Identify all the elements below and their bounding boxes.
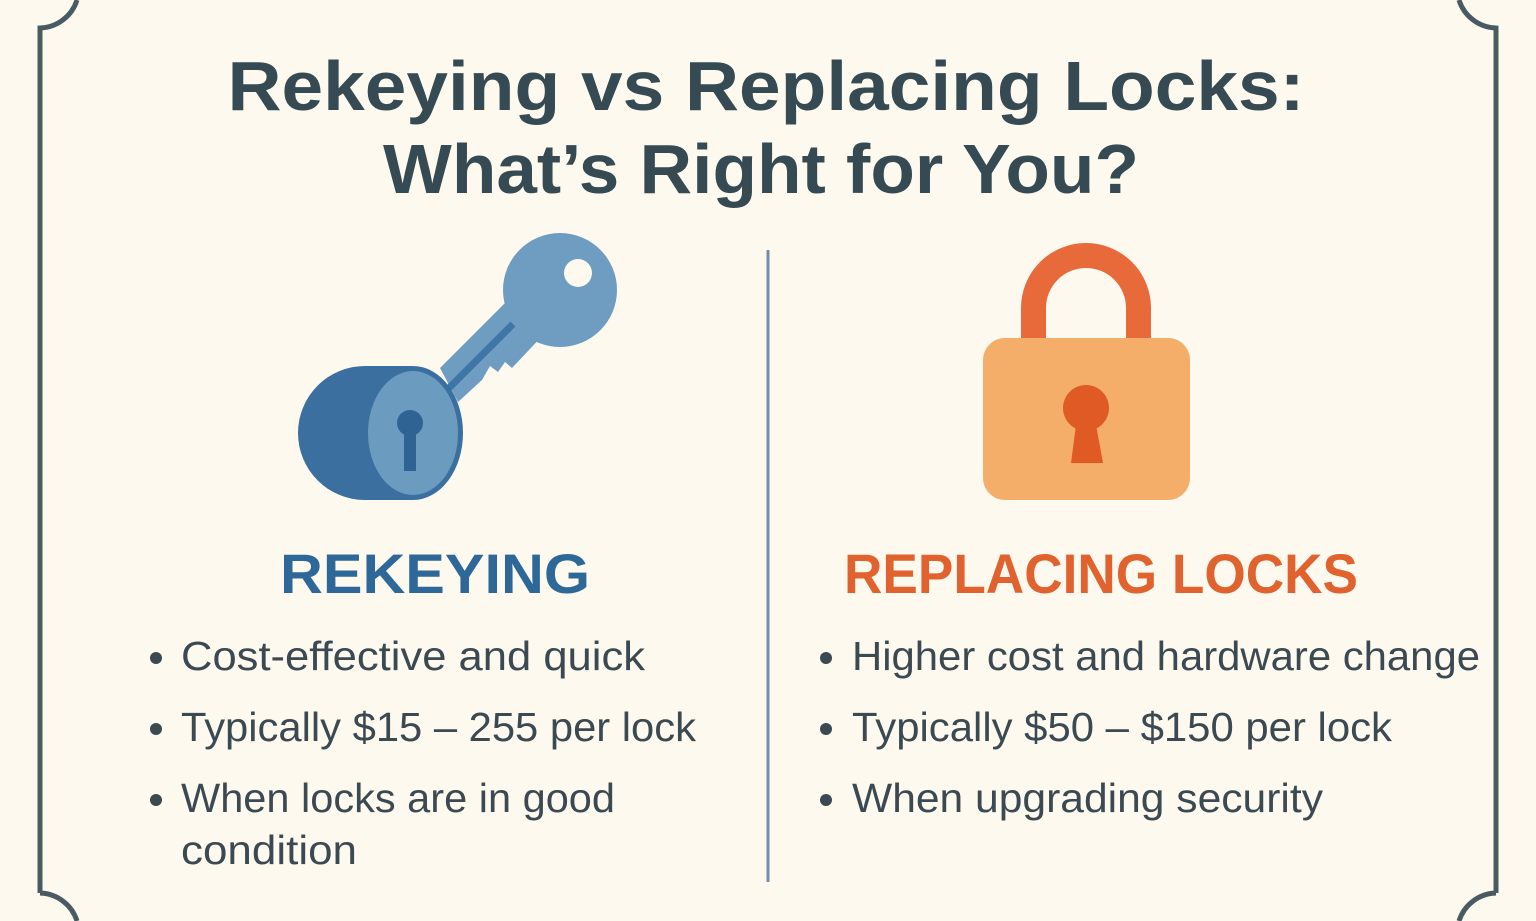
heading: replacing locks: REPLACING LOCKS bbox=[844, 542, 1358, 605]
list: rekeying points: Typically $15 – 255 per lock bbox=[181, 704, 696, 750]
title bbox=[228, 47, 1304, 208]
list: replacing points bbox=[820, 633, 1480, 821]
title: What’s Right for You? bbox=[383, 130, 1139, 208]
icon: padlock bbox=[983, 256, 1190, 500]
list: rekeying points bbox=[150, 633, 696, 873]
list: replacing points: When upgrading security bbox=[852, 775, 1324, 821]
icon: key in lock cylinder bbox=[298, 233, 617, 500]
list: rekeying points: condition bbox=[181, 827, 357, 873]
list: replacing points: Higher cost and hardware change bbox=[852, 633, 1480, 679]
divider bbox=[766, 250, 770, 882]
list: rekeying points: When locks are in good bbox=[181, 775, 615, 821]
list: replacing points: Typically $50 – $150 per lock bbox=[852, 704, 1393, 750]
list: rekeying points: Cost-effective and quick bbox=[181, 633, 646, 679]
heading: rekeying: REKEYING bbox=[280, 542, 590, 605]
title: Rekeying vs Replacing Locks: bbox=[228, 47, 1304, 125]
